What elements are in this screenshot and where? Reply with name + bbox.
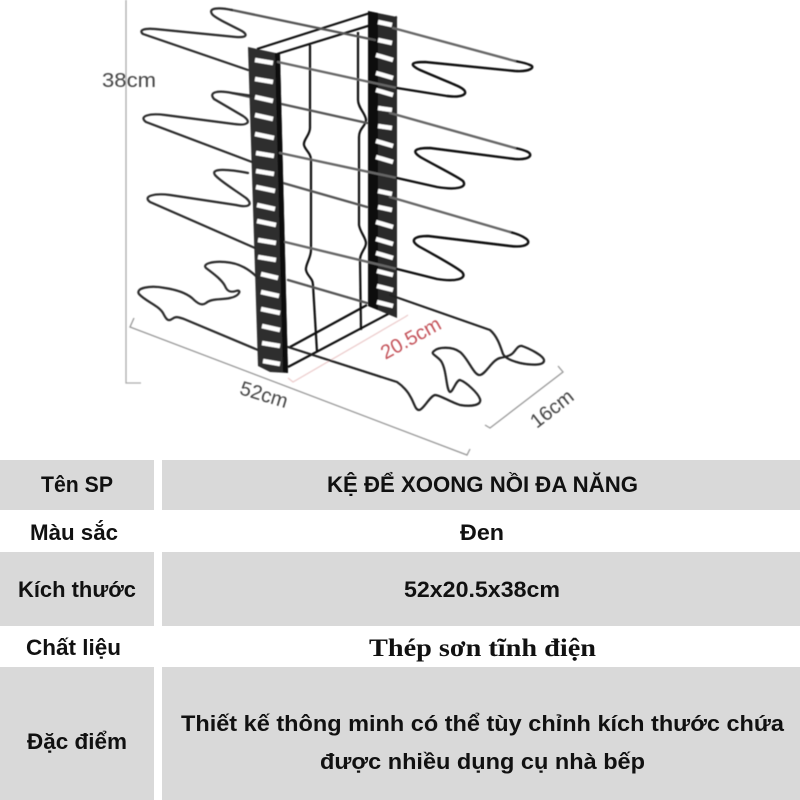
dimension: depth 16cm: [485, 366, 578, 433]
row: size: [0, 552, 800, 626]
row: colour: Màu sắc: [30, 520, 118, 545]
row: material: Chất liệu: [26, 635, 121, 660]
dimension: height 38cm: 38cm: [102, 70, 156, 92]
row: features: Thiết kế thông minh có thể tùy chỉnh kích thước chứa: [181, 711, 785, 736]
row: features: Đặc điểm: [27, 729, 127, 754]
row: product name: Tên SP: [41, 472, 113, 497]
rack frame rails: [257, 13, 397, 367]
bottom rods with feet: [288, 295, 544, 410]
dimension: width 20.5cm: [288, 313, 445, 382]
dimension: height 38cm: [102, 0, 156, 383]
rods passing behind the front post: [232, 10, 375, 303]
row: colour: Đen: [460, 520, 504, 545]
row: material: [26, 635, 596, 662]
dimension: length 52cm: 52cm: [237, 378, 290, 413]
specification table: [0, 460, 800, 800]
row: product name: [0, 460, 800, 510]
upper rods, right side: [278, 28, 532, 280]
row: material: Thép sơn tĩnh điện: [369, 635, 596, 662]
row: features: được nhiều dụng cụ nhà bếp: [320, 749, 645, 774]
dimension: length 52cm: [130, 318, 470, 455]
row: colour: [30, 520, 504, 545]
upper rods, left side: [138, 8, 258, 350]
row: product name: KỆ ĐỂ XOONG NỒI ĐA NĂNG: [327, 472, 638, 497]
dimension: depth 16cm: 16cm: [526, 386, 578, 433]
left post: [248, 47, 288, 373]
right post: [368, 11, 397, 318]
dimension: width 20.5cm: 20.5cm: [377, 313, 445, 364]
row: size: Kích thước: [18, 577, 136, 602]
row: size: 52x20.5x38cm: [404, 577, 560, 602]
row: features: [0, 667, 800, 800]
product diagram: pot rack with dimensions: [102, 0, 578, 455]
